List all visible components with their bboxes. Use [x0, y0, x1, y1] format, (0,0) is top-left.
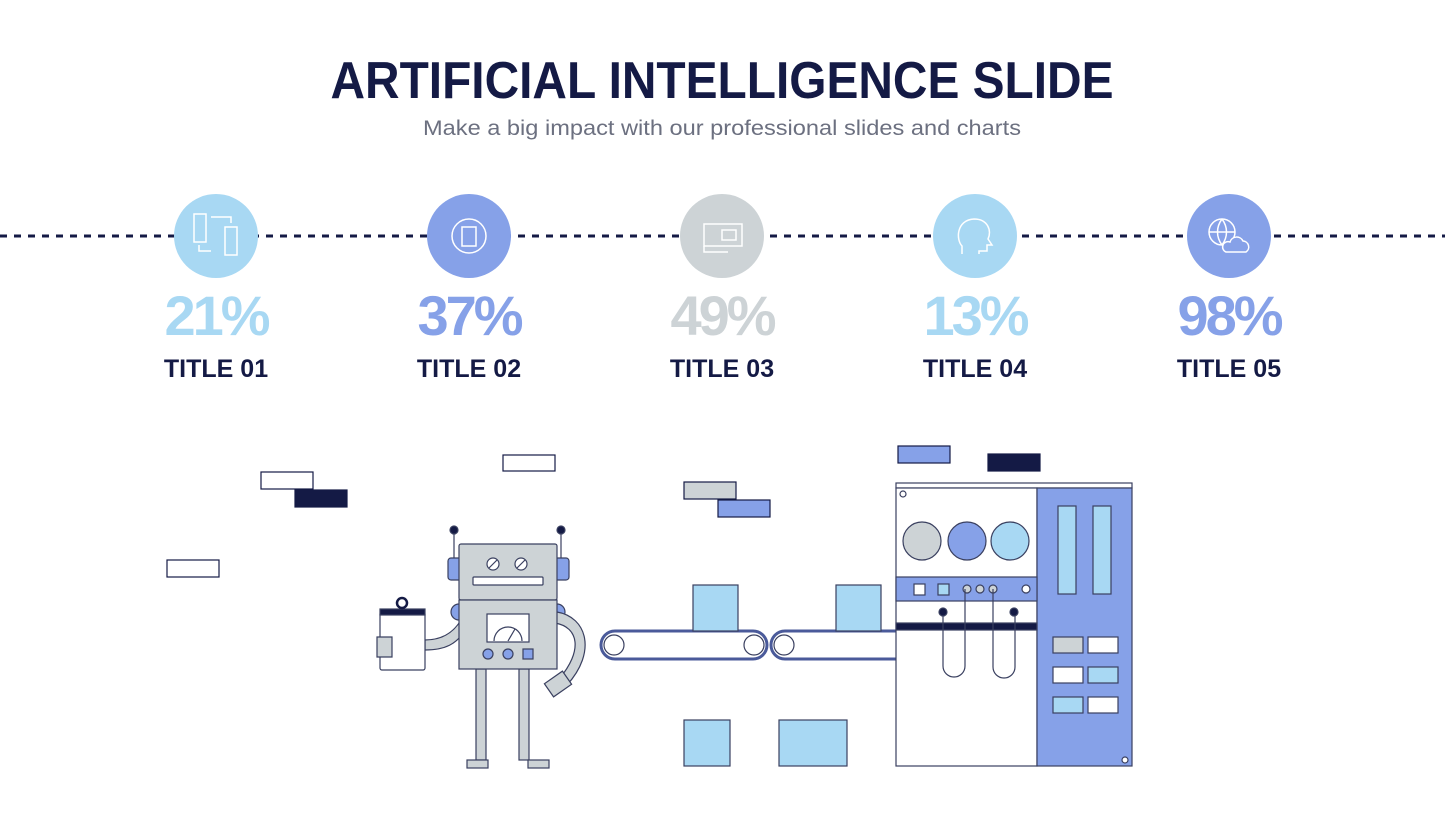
- item 1: [164, 194, 270, 383]
- icon: globe cloud: [1187, 194, 1271, 278]
- item 4: [923, 194, 1029, 383]
- label 3: TITLE 03: [670, 355, 774, 383]
- label 1: TITLE 01: [164, 355, 268, 383]
- conveyor belt: [601, 585, 911, 766]
- machine: [896, 483, 1132, 766]
- stat 4: 13%: [923, 284, 1029, 347]
- title: ARTIFICIAL INTELLIGENCE SLIDE: [330, 52, 1114, 110]
- stat 1: 21%: [164, 284, 270, 347]
- item 3: [670, 194, 776, 383]
- icon: AI head: [933, 194, 1017, 278]
- item 5: [1177, 194, 1283, 383]
- subtitle: Make a big impact with our professional slides and charts: [423, 117, 1021, 140]
- stat 3: 49%: [670, 284, 776, 347]
- stat 2: 37%: [417, 284, 523, 347]
- label 4: TITLE 04: [923, 355, 1027, 383]
- icon: servers transfer: [174, 194, 258, 278]
- icon: circuit card: [680, 194, 764, 278]
- robot: [377, 526, 585, 768]
- label 5: TITLE 05: [1177, 355, 1281, 383]
- stat 5: 98%: [1177, 284, 1283, 347]
- icon: memory card cycle: [427, 194, 511, 278]
- floating blocks: [167, 446, 1040, 577]
- label 2: TITLE 02: [417, 355, 521, 383]
- item 2: [417, 194, 523, 383]
